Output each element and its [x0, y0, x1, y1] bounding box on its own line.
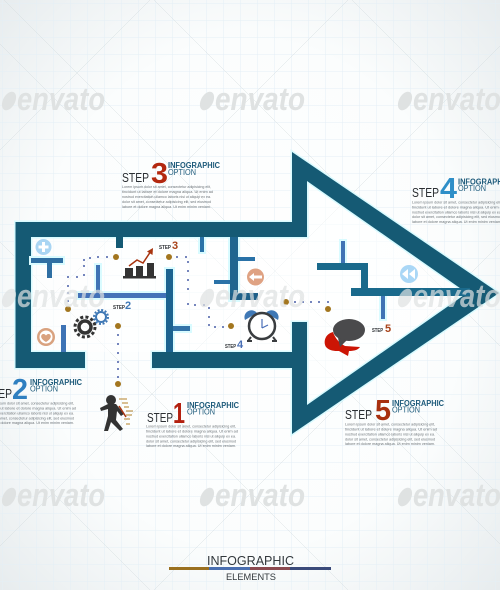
text block: step 5: labore et dolore magna aliqua. Ut enim minim veniam. — [345, 441, 435, 446]
small label: step 2: STEP — [113, 305, 126, 311]
dotted route: step 2 to step 3 — [67, 256, 108, 302]
text block: step 1: dolor sit amet, consectetur adipisicing elit, sed eiusmod — [146, 438, 236, 444]
text block: step 3: STEP — [122, 170, 149, 185]
icon: heart — [37, 328, 55, 346]
watermark row 1: envato — [17, 81, 105, 117]
text block: step 2: OPTION — [30, 384, 58, 394]
dotted route: step 4 to step 5 — [294, 301, 329, 303]
text block: step 3: nostrud exercitation ullamco laboris nisi ut aliquip ex ea. — [122, 194, 211, 199]
small label: step 2: 2 — [125, 300, 131, 312]
footer title — [169, 553, 331, 583]
text block: step 5: 5 — [375, 395, 391, 427]
small label: step 2 — [113, 300, 131, 312]
text block: step 4 — [412, 173, 500, 224]
icon: bar chart — [123, 248, 156, 278]
text block: step 3: tincidunt ut labore et dolore magna aliqua. Ut enim ad — [122, 189, 213, 194]
text block: step 4: OPTION — [458, 184, 486, 193]
watermark row 2 — [0, 278, 500, 314]
text block: step 5: OPTION — [392, 406, 420, 414]
small label: step 4: STEP — [225, 344, 237, 350]
text block: step 3: labore et dolore magna aliqua. Ut enim minim veniam. — [122, 204, 211, 209]
icon: rewind — [400, 265, 418, 283]
icon: running person — [100, 395, 133, 431]
text block: step 2: INFOGRAPHIC — [30, 378, 82, 387]
dotted route: step 1 to step 2 — [117, 334, 119, 378]
text block: step 5: INFOGRAPHIC — [392, 399, 444, 408]
text block: step 4: STEP — [412, 185, 439, 200]
footer title: ELEMENTS — [226, 572, 276, 583]
text block: step 1: labore et dolore magna aliqua. Ut enim minim veniam. — [146, 443, 236, 448]
small label: step 5 — [372, 323, 391, 335]
dotted route: step 3 to step 4 — [176, 256, 224, 328]
text block: step 1 — [146, 398, 239, 448]
text block: step 1: tincidunt ut labore et dolore magna aliqua. Ut enim ad — [146, 428, 238, 434]
watermark row 2: envato — [215, 278, 305, 314]
maze inner walls — [29, 237, 470, 352]
text block: step 1: INFOGRAPHIC — [187, 401, 239, 410]
small label: step 4: 4 — [237, 339, 244, 351]
icon: back arrow — [247, 268, 264, 286]
text block: step 1: Lorem ipsum dolor sit amet, consectetur adipisicing elit, — [146, 424, 236, 428]
text block: step 5: tincidunt ut labore et dolore magna aliqua. Ut enim ad — [345, 426, 437, 432]
text block: step 3: INFOGRAPHIC — [168, 161, 220, 170]
text block: step 2: 2 — [12, 374, 28, 406]
text block: step 1: OPTION — [187, 408, 215, 416]
watermark row 2: envato — [17, 278, 105, 314]
icon: gears — [75, 310, 108, 337]
watermark row 3: envato — [215, 477, 305, 513]
text block: step 3: 3 — [151, 158, 168, 190]
text block: step 5 — [345, 395, 444, 446]
watermark row 1: envato — [215, 81, 305, 117]
small label: step 5: 5 — [385, 323, 391, 335]
text block: step 1: STEP — [147, 410, 173, 425]
text block: step 2 — [0, 374, 82, 425]
small label: step 3 — [159, 240, 178, 252]
text block: step 3 — [122, 158, 220, 209]
text block: step 5: STEP — [345, 407, 372, 422]
small label: step 3: STEP — [159, 245, 172, 251]
text block: step 3: Lorem ipsum dolor sit amet, consectetur adipisicing elit, — [122, 184, 211, 189]
icon: alarm clock — [244, 310, 279, 341]
watermark row 3 — [0, 477, 500, 513]
icon: speech bubbles — [325, 319, 365, 356]
footer title: INFOGRAPHIC — [207, 553, 294, 568]
text block: step 5: nostrud exercitation ullamco laboris nisi ut aliquip ex ea. — [345, 432, 435, 436]
small label: step 5: STEP — [372, 328, 384, 334]
text block: step 5: Lorem ipsum dolor sit amet, consectetur adipisicing elit, — [345, 422, 435, 426]
text block: step 3: dolor sit amet, consectetur adipisicing elit, sed eiusmod — [122, 199, 211, 204]
route waypoints — [65, 254, 331, 387]
text block: step 1: 1 — [173, 398, 185, 430]
text block: step 5: dolor sit amet, consectetur adipisicing elit, sed eiusmod — [345, 436, 435, 442]
small label: step 3: 3 — [172, 240, 178, 252]
arrow maze outline — [16, 152, 499, 434]
watermark row 1 — [0, 81, 500, 117]
small label: step 4 — [225, 339, 244, 351]
watermark row 3: envato — [17, 477, 105, 513]
text block: step 1: nostrud exercitation ullamco laboris nisi ut aliquip ex ea. — [146, 434, 236, 438]
text block: step 4: 4 — [440, 173, 457, 205]
text block: step 3: OPTION — [168, 168, 196, 177]
icon: plus — [36, 239, 52, 255]
